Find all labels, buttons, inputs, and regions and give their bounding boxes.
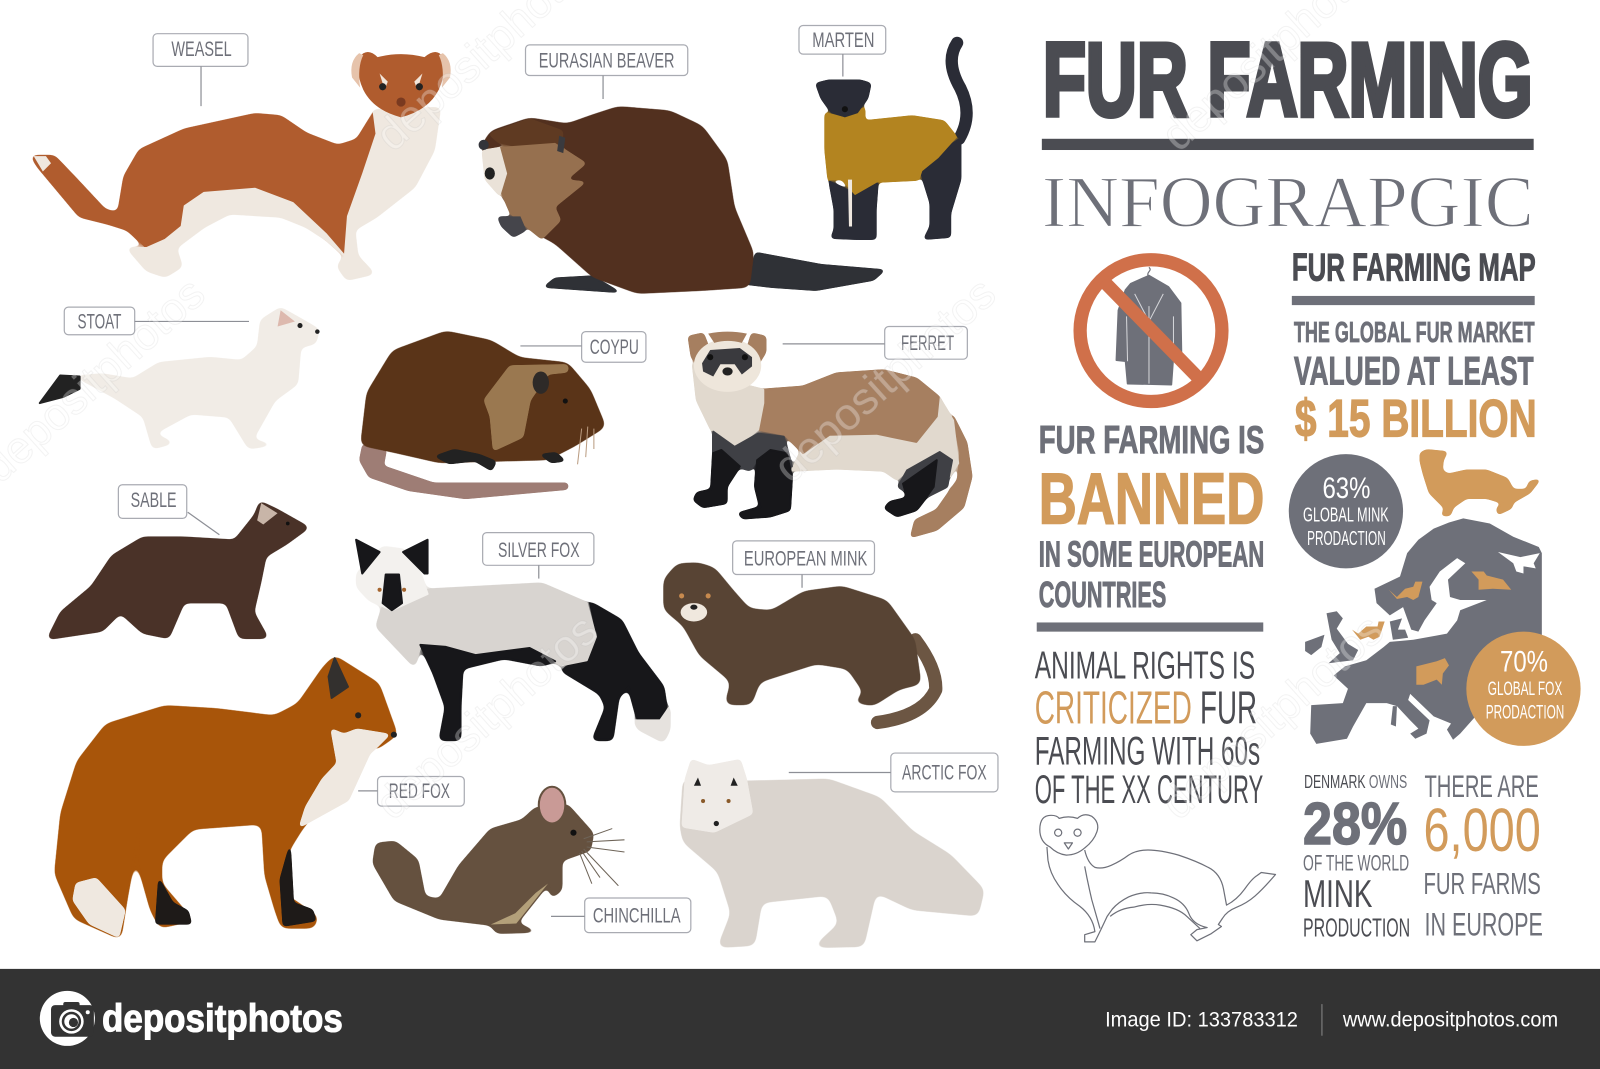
- label: weasel: WEASEL: [171, 37, 232, 61]
- animal: silver fox: [356, 540, 669, 742]
- label: european mink: [733, 541, 874, 588]
- text: animal rights: FARMING WITH 60s: [1035, 729, 1260, 773]
- text: ban statement: IN SOME EUROPEAN: [1039, 534, 1264, 574]
- icon: orange mink: [1420, 450, 1540, 515]
- text: ban statement: FUR FARMING IS: [1039, 419, 1264, 462]
- stat: 6000 fur farms: IN EUROPE: [1424, 906, 1543, 943]
- label: stoat: STOAT: [78, 310, 121, 334]
- stat: 63% mink: 63%: [1322, 472, 1370, 505]
- watermark: [0, 0, 1393, 829]
- watermark: depositphotos: [365, 604, 607, 829]
- stat: 63% mink: [1289, 454, 1403, 568]
- stat: 70% fox: 70%: [1500, 645, 1548, 678]
- logo: wordmark: depositphotos: [102, 998, 343, 1041]
- label: eurasian beaver: [526, 45, 688, 99]
- label: marten: MARTEN: [812, 28, 874, 52]
- stat: 6000 fur farms: 6,000: [1423, 796, 1541, 864]
- label: red fox: [358, 777, 464, 806]
- animal: coypu: [360, 332, 605, 498]
- watermark: depositphotos: [763, 267, 1005, 492]
- label: silver fox: SILVER FOX: [498, 538, 580, 562]
- text: ban statement: [1037, 419, 1264, 632]
- stat: denmark mink share: MINK: [1303, 873, 1373, 916]
- animal: chinchilla: [373, 787, 624, 933]
- image id: Image ID: 133783312: [1105, 1008, 1298, 1032]
- label: european mink: EUROPEAN MINK: [744, 546, 868, 570]
- label: weasel: [153, 34, 248, 106]
- icon: banned fur coat: [1080, 260, 1222, 402]
- label: silver fox: [483, 533, 594, 579]
- icon: weasel outline: [1040, 815, 1276, 942]
- label: chinchilla: CHINCHILLA: [593, 903, 681, 927]
- text: animal rights: ANIMAL RIGHTS IS: [1035, 645, 1255, 688]
- logo: camera mark: [40, 991, 95, 1046]
- label: red fox: RED FOX: [389, 779, 450, 803]
- text: market value: [1294, 317, 1537, 449]
- animal: stoat: [40, 308, 320, 448]
- label: sable: SABLE: [131, 488, 177, 512]
- label: marten: [799, 26, 886, 77]
- animal: eurasian beaver: [479, 107, 884, 293]
- heading: fur farming map: [1292, 247, 1536, 305]
- text: animal rights: OF THE XX CENTURY: [1035, 768, 1263, 812]
- text: animal rights: FUR: [1200, 681, 1257, 733]
- animal: marten: [816, 43, 967, 239]
- animal: ferret: [689, 332, 971, 537]
- label: ferret: FERRET: [901, 331, 954, 355]
- label: sable: [118, 485, 219, 535]
- mini animals on the map: [1352, 571, 1511, 685]
- stat: 6000 fur farms: THERE ARE: [1424, 768, 1539, 804]
- label: eurasian beaver: EURASIAN BEAVER: [539, 48, 674, 72]
- stat: denmark mink share: [1303, 771, 1410, 943]
- stat: 63% mink: GLOBAL MINK: [1303, 504, 1389, 526]
- animal: arctic fox: [681, 760, 984, 947]
- watermark: depositphotos: [1151, 604, 1393, 829]
- stat: 70% fox: [1466, 632, 1581, 746]
- label: arctic fox: [789, 753, 998, 792]
- stat: denmark mink share: PRODUCTION: [1303, 915, 1410, 943]
- label: arctic fox: ARCTIC FOX: [902, 761, 987, 785]
- label: ferret: [783, 327, 967, 359]
- text: ban statement: COUNTRIES: [1039, 575, 1166, 615]
- text: ban statement: BANNED: [1039, 458, 1264, 539]
- label: chinchilla: [551, 898, 691, 933]
- animal: red fox: [55, 656, 397, 939]
- stat: 6000 fur farms: [1423, 768, 1543, 943]
- map: europe: [1305, 518, 1542, 744]
- stat: denmark mink share: 28%: [1303, 790, 1407, 857]
- animal: sable: [48, 502, 308, 639]
- subtitle: INFOGRAPGIC: [1042, 162, 1534, 243]
- website: www.depositphotos.com: [1342, 1008, 1558, 1032]
- label: coypu: COYPU: [590, 335, 639, 359]
- label: coypu: [520, 332, 646, 362]
- stat: denmark mink share: DENMARK OWNS: [1304, 771, 1407, 792]
- stat: 6000 fur farms: FUR FARMS: [1423, 867, 1541, 901]
- text: animal rights: [1035, 645, 1263, 812]
- footer bar: [0, 969, 1600, 1069]
- text: animal rights: CRITICIZED: [1035, 681, 1192, 733]
- label: stoat: [64, 307, 249, 335]
- stat: 63% mink: PRODACTION: [1307, 528, 1386, 550]
- stat: denmark mink share: OF THE WORLD: [1303, 850, 1409, 875]
- animal: european mink: [664, 563, 936, 722]
- animal: weasel: [32, 52, 451, 280]
